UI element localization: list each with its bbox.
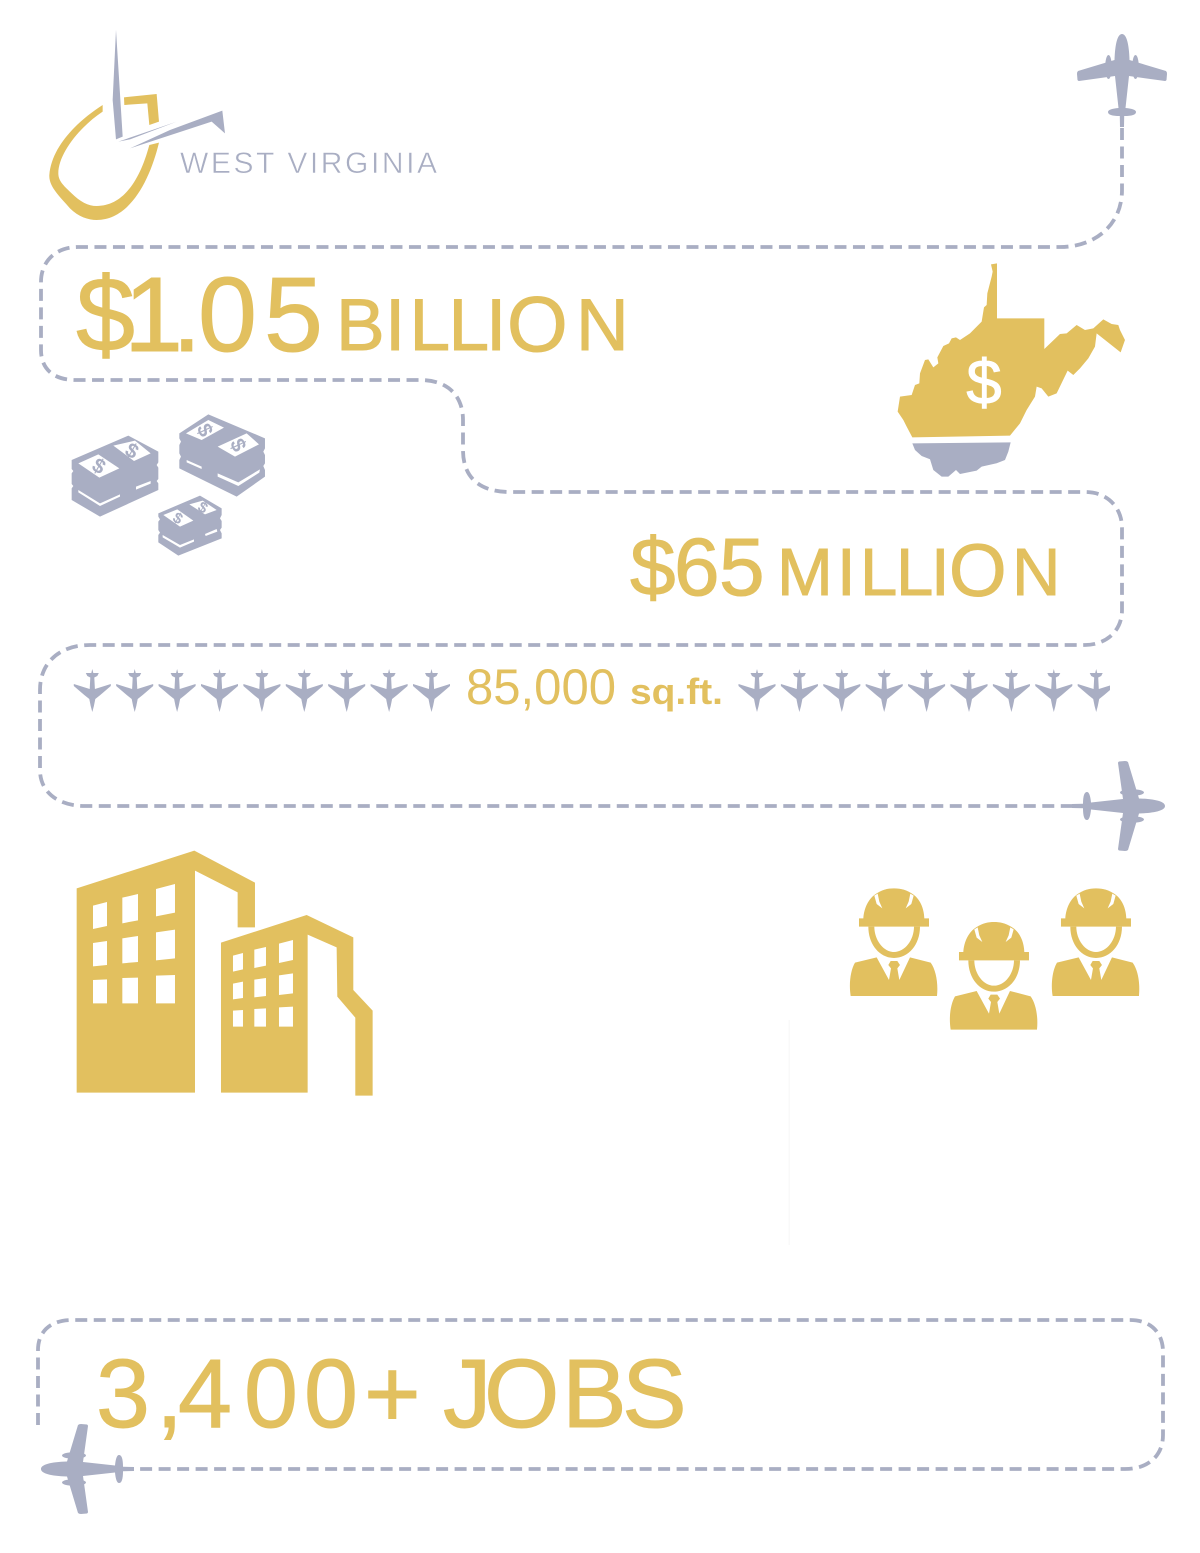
stat: $65 million: [630, 522, 1060, 613]
stack left: $: [88, 454, 110, 480]
plane: bottom left: [41, 1424, 134, 1514]
row of small planes: right: [738, 669, 1115, 712]
icon: West Virginia map with dollar sign: $: [966, 348, 1002, 418]
logo wordmark: WEST VIRGINIA: [180, 147, 437, 180]
icon: stacks of money: [72, 414, 265, 556]
unit: O: [949, 529, 1007, 612]
unit: BILLI: [336, 285, 506, 366]
stack left: [72, 436, 158, 517]
stack right: $: [225, 435, 251, 456]
stack right: [179, 414, 265, 497]
figure: $65: [630, 522, 765, 613]
stack small: $: [195, 499, 211, 518]
figure: $1.05: [76, 256, 323, 374]
icon: workers in hard hats: [850, 888, 1139, 1030]
dashed flight path: upper: [40, 128, 1122, 806]
logo mark: [49, 30, 225, 220]
worker centre: [950, 922, 1037, 1030]
row of small planes: left: [74, 669, 450, 712]
dashed flight path: lower: [38, 1320, 1163, 1469]
stack small: $: [170, 509, 186, 528]
worker right: [1052, 888, 1139, 996]
stack right: $: [192, 420, 218, 441]
unit: O: [507, 280, 568, 368]
tall building: [77, 851, 255, 1093]
unit: N: [1012, 535, 1060, 610]
stat: 3,400+ jobs: [96, 1339, 687, 1448]
worker left: [850, 888, 937, 996]
unit: JOBS: [443, 1339, 687, 1448]
logo: West Virginia: [49, 30, 437, 220]
icon: West Virginia map with dollar sign: [898, 263, 1125, 477]
unit: sq.ft.: [630, 671, 723, 712]
stack left: $: [121, 438, 143, 464]
plane: top right: [1077, 34, 1167, 127]
unit: N: [576, 285, 629, 366]
stat: 85,000 sq.ft.: [466, 659, 723, 715]
icon: office buildings: [77, 851, 373, 1096]
faint divider: [788, 1020, 790, 1245]
unit: MILLI: [777, 535, 950, 610]
figure: 3,400+: [96, 1339, 421, 1448]
figure: 85,000: [466, 659, 616, 715]
stat: $1.05 billion: [76, 256, 629, 374]
short building: [221, 915, 373, 1096]
stack small: [158, 496, 222, 556]
plane: right, middle: [1072, 761, 1165, 851]
